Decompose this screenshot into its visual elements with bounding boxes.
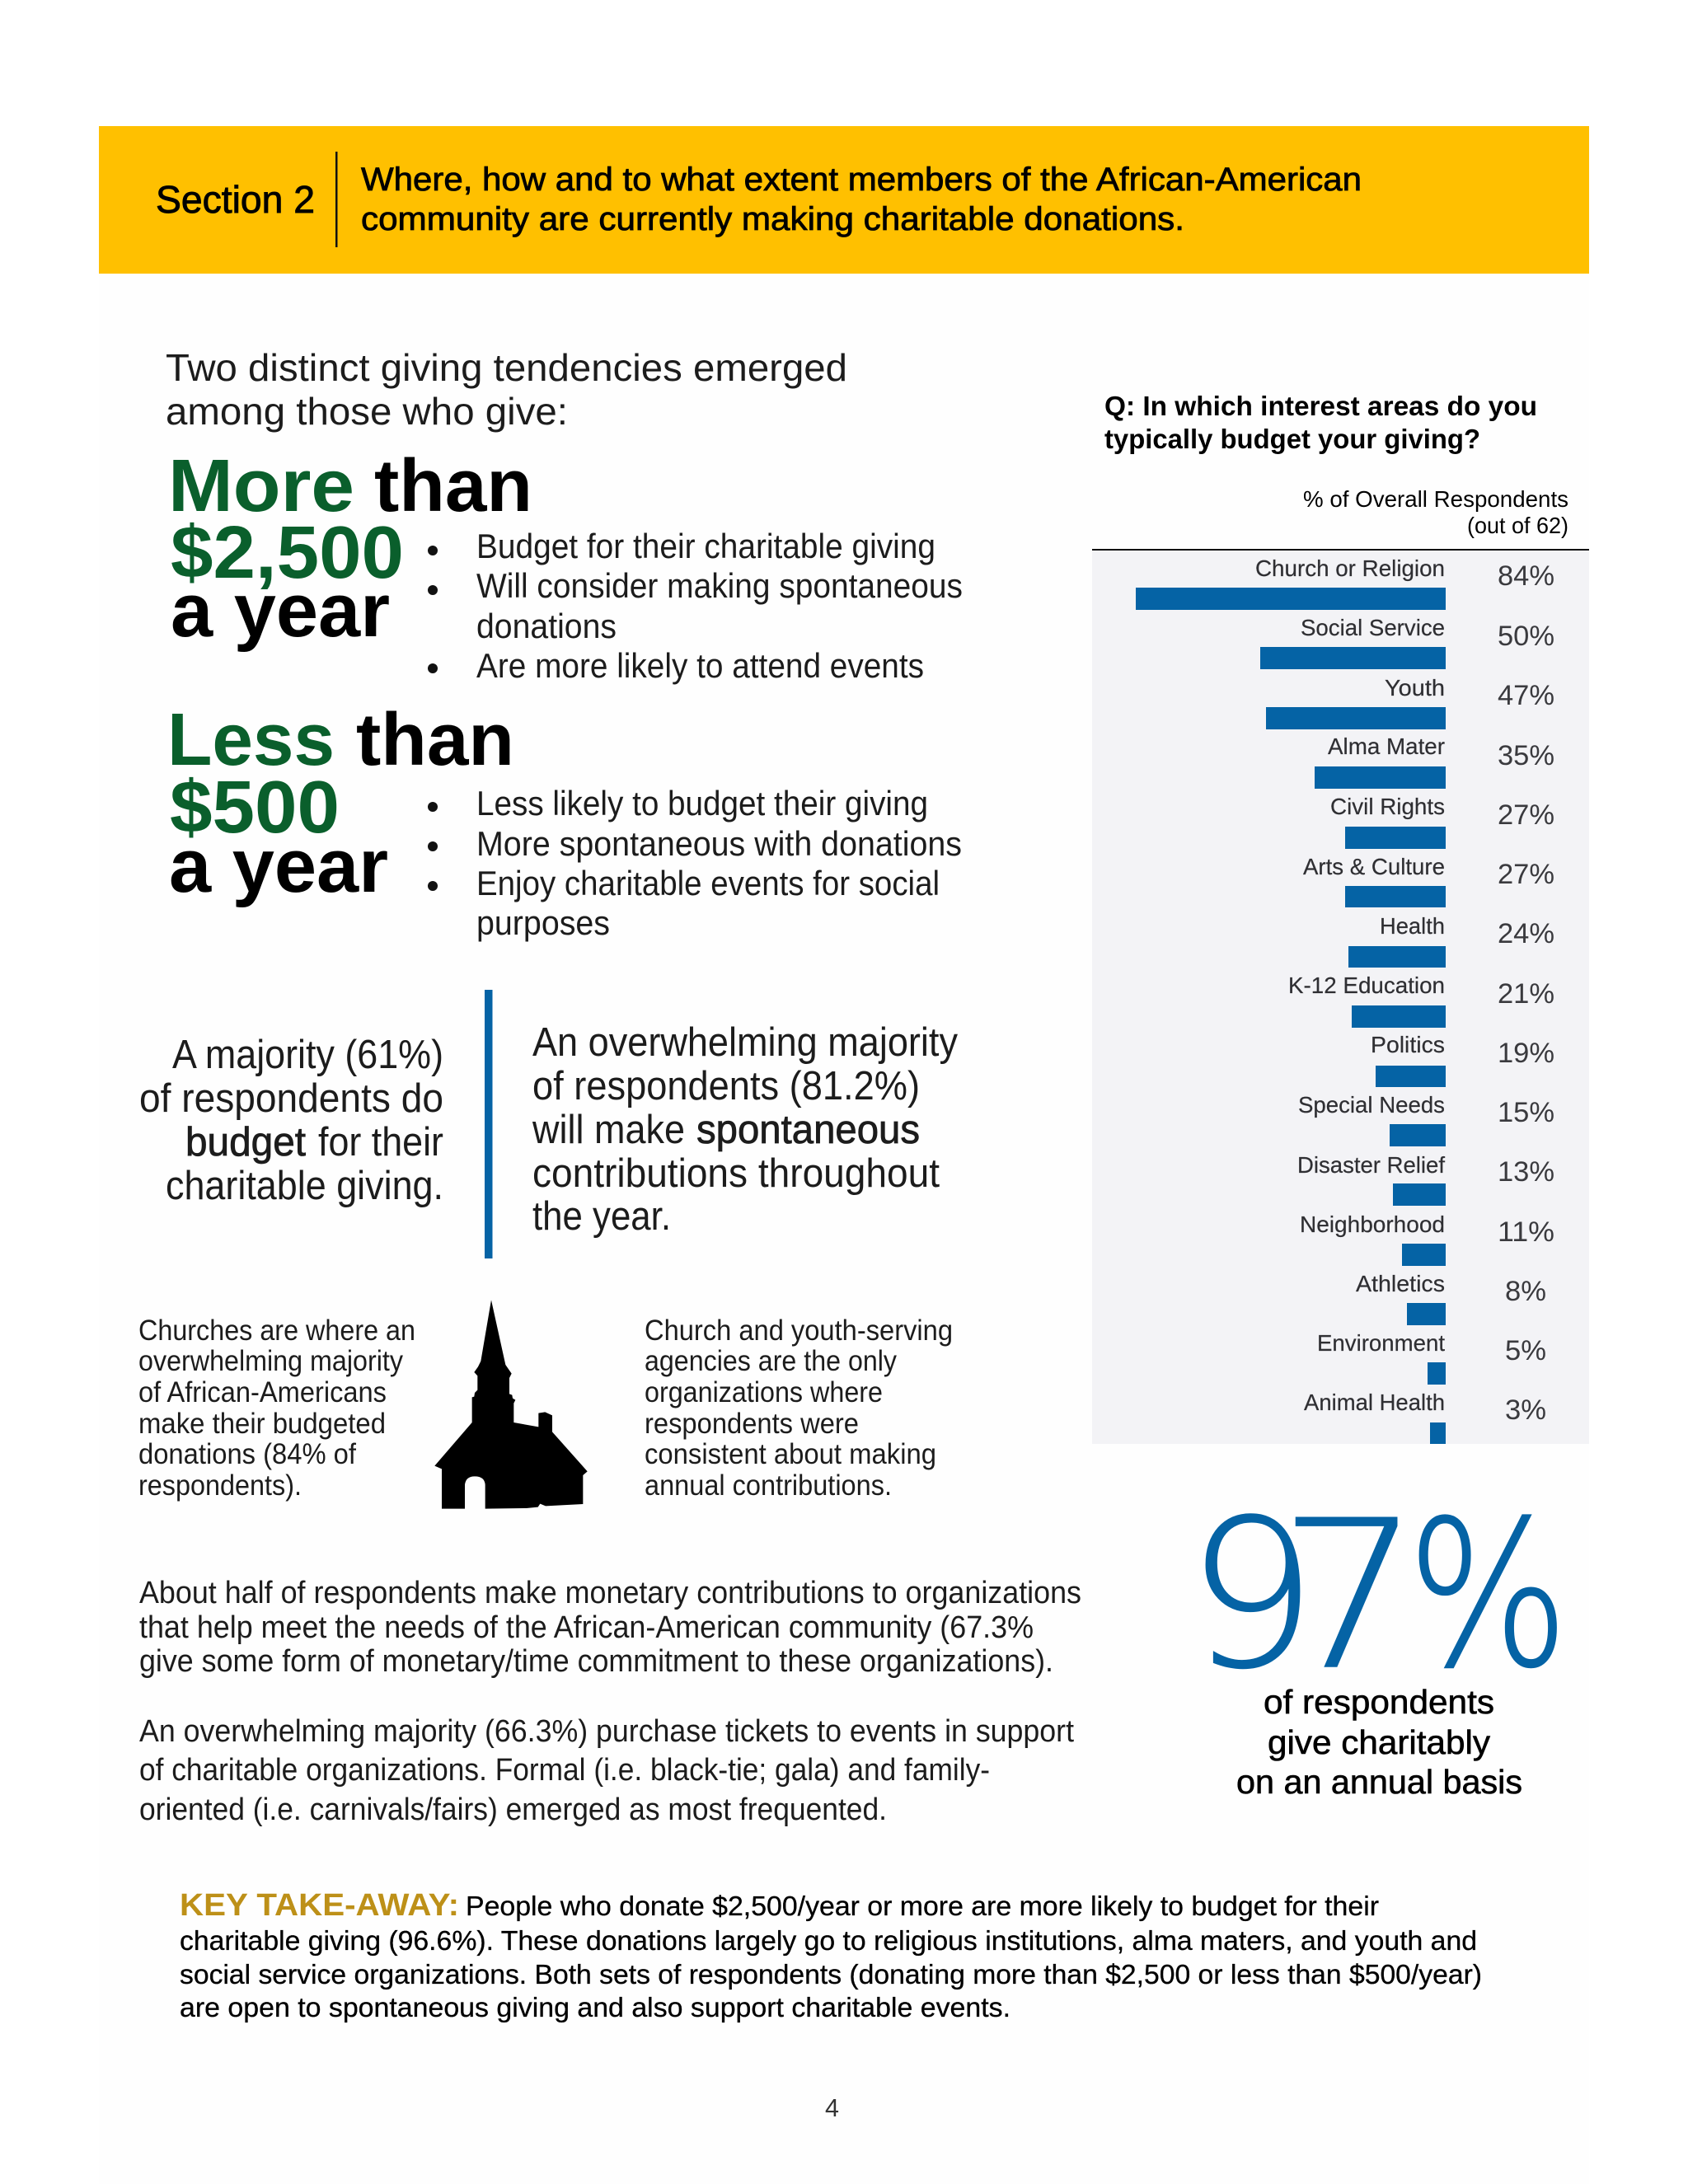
callout: 61% budget: A majority (61%) [172,1033,443,1077]
heading: less than $500 a year: $500 [170,766,340,849]
row: environment [1317,1330,1546,1385]
row: environment: 5% [1505,1335,1546,1366]
row: animal health: 3% [1505,1394,1546,1426]
callout: 61% budget: budget [185,1120,306,1165]
callout: 61% budget [139,1033,443,1208]
section heading [361,162,1362,237]
key take-away [180,1888,1482,2022]
heading: less than $500 a year [167,699,514,908]
text: church and youth-serving agencies: Church and youth-serving [645,1315,953,1347]
text: churches: of African-Americans [138,1376,387,1408]
text: churches: overwhelming majority [138,1345,403,1377]
chart column header [1303,486,1568,538]
row: arts and culture [1303,854,1554,907]
text: church and youth-serving agencies: agencies are the only [645,1345,897,1377]
bullet list: more than $2,500: Are more likely to attend events [476,646,924,685]
row: athletics [1356,1271,1546,1325]
chart column header: % of Overall Respondents [1303,486,1568,512]
callout: 81.2% spontaneous: contributions throughout [532,1151,940,1196]
callout: 81.2% spontaneous: the year. [532,1194,671,1239]
row: disaster relief: 13% [1498,1156,1554,1188]
chart question heading [1104,391,1537,454]
section header band [99,126,1589,274]
stat caption [1236,1683,1522,1801]
row: neighborhood: Neighborhood [1300,1212,1445,1237]
row: politics: Politics [1371,1032,1445,1057]
heading: less than $500 a year: a year [169,824,388,908]
row: civil rights [1330,794,1554,849]
row: health [1348,913,1554,968]
big stat: 97%: 7 [1278,1477,1422,1715]
row: environment: Environment [1317,1330,1445,1356]
paragraph: event tickets: oriented (i.e. carnivals/fairs) emerged as most frequented. [139,1793,887,1827]
chart question heading: Q: In which interest areas do you [1104,391,1537,421]
row: alma mater [1315,733,1554,789]
paragraph: event tickets: of charitable organizations. Formal (i.e. black-tie; gala) and family- [139,1753,990,1788]
blue vertical divider [485,990,493,1258]
row: disaster relief [1297,1152,1554,1206]
row: neighborhood: 11% [1498,1216,1554,1248]
row: animal health: Animal Health [1304,1390,1445,1415]
row: church or religion: 84% [1498,560,1554,592]
bullet list: less than $500: Less likely to budget their giving [476,784,928,823]
row: church or religion [1136,555,1554,610]
heading: more than $2,500 a year: a year [171,569,390,653]
row: civil rights: 27% [1498,799,1554,831]
bullet list: less than $500 [428,784,962,942]
callout: 61% budget: for their [318,1120,443,1165]
key take-away: People who donate $2,500/year or more are more likely to budget for their [466,1891,1379,1921]
row: health: 24% [1498,918,1554,949]
row: civil rights: Civil Rights [1330,794,1445,819]
heading: less than $500 a year: than [356,699,514,781]
row: special needs: Special Needs [1298,1092,1445,1118]
bullet list: more than $2,500: donations [476,607,617,645]
bullet list: more than $2,500: Will consider making spontaneous [476,566,963,605]
callout: 81.2% spontaneous: will make [532,1108,685,1152]
text: church and youth-serving agencies: consistent about making [645,1438,936,1470]
heading: more than $2,500 a year: than [374,445,532,527]
callout: 61% budget: of respondents do [139,1076,443,1121]
intro text: among those who give: [166,390,568,433]
chart column header: (out of 62) [1467,513,1568,538]
callout: 81.2% spontaneous [532,1020,958,1239]
intro text: Two distinct giving tendencies emerged [166,346,847,389]
key take-away: KEY TAKE-AWAY: [180,1888,459,1923]
big stat: 97% [1186,1476,1569,1715]
row: arts and culture: 27% [1498,859,1554,890]
paragraph: monetary contributions [139,1576,1081,1679]
bullet list: less than $500: Enjoy charitable events for social [476,864,940,902]
row: athletics: Athletics [1356,1271,1445,1296]
text: churches: donations (84% of [138,1438,356,1470]
heading: more than $2,500 a year: More [168,445,354,527]
bullet list: more than $2,500 [428,527,963,685]
text: churches [138,1315,415,1502]
text: church and youth-serving agencies: annual contributions. [645,1469,892,1502]
row: social service: 50% [1498,621,1554,652]
key take-away: are open to spontaneous giving and also support charitable events. [180,1992,1010,2022]
row: k-12 education: 21% [1498,978,1554,1010]
callout: 81.2% spontaneous: An overwhelming majority [532,1020,958,1065]
row: social service [1260,615,1554,669]
key take-away: social service organizations. Both sets of respondents (donating more than $2,500 or less than $500/year) [180,1959,1482,1990]
row: special needs [1298,1092,1554,1146]
row: arts and culture: Arts & Culture [1303,854,1445,879]
key take-away: charitable giving (96.6%). These donations largely go to religious institutions, alma maters, and youth and [180,1925,1477,1956]
row: k-12 education [1288,972,1554,1028]
big stat: 97%: 9 [1186,1476,1317,1714]
text: church and youth-serving agencies: respondents were [645,1408,859,1440]
row: k-12 education: K-12 Education [1288,972,1445,998]
row: animal health [1304,1390,1546,1444]
text: churches: respondents). [138,1469,302,1502]
row: youth: Youth [1385,675,1445,701]
intro text [166,346,847,433]
section label: Section 2 [156,178,315,221]
row: church or religion: Church or Religion [1255,555,1445,581]
paragraph: event tickets: An overwhelming majority (66.3%) purchase tickets to events in support [139,1714,1074,1749]
row: disaster relief: Disaster Relief [1297,1152,1445,1178]
row: special needs: 15% [1498,1097,1554,1128]
chart question heading: typically budget your giving? [1104,424,1480,454]
row: politics: 19% [1498,1038,1554,1069]
heading: more than $2,500 a year: $2,500 [171,512,404,594]
row: alma mater: 35% [1498,740,1554,771]
bullet list: less than $500: purposes [476,903,610,942]
stat caption: on an annual basis [1236,1763,1522,1801]
paragraph: monetary contributions: About half of respondents make monetary contributions to organizations [139,1576,1081,1610]
row: politics [1371,1032,1554,1087]
callout: 81.2% spontaneous: spontaneous [696,1108,920,1152]
stat caption: of respondents [1264,1683,1494,1721]
callout: 61% budget: charitable giving. [166,1164,443,1208]
section heading: Where, how and to what extent members of the African-American [361,162,1362,198]
row: neighborhood [1300,1212,1554,1266]
row: health: Health [1380,913,1445,939]
stat caption: give charitably [1268,1723,1491,1761]
row: social service: Social Service [1301,615,1445,640]
bullet list: more than $2,500: Budget for their charitable giving [476,527,935,565]
row: youth [1266,675,1554,729]
heading: less than $500 a year: Less [167,699,335,781]
page number: 4 [825,2093,839,2122]
heading: more than $2,500 a year [168,445,532,653]
text: churches: Churches are where an [138,1315,415,1347]
text: churches: make their budgeted [138,1408,386,1440]
bullet list: less than $500: More spontaneous with donations [476,824,962,863]
callout: 81.2% spontaneous: of respondents (81.2%) [532,1064,920,1108]
big stat: 97%: % [1407,1478,1569,1713]
paragraph: monetary contributions: that help meet the needs of the African-American community (67.3% [139,1610,1034,1645]
row: alma mater: Alma Mater [1328,733,1445,759]
row: youth: 47% [1498,680,1554,711]
text: church and youth-serving agencies: organizations where [645,1376,883,1408]
section heading: community are currently making charitable donations. [361,201,1184,237]
bar chart: interest areas [1092,549,1589,1444]
paragraph: monetary contributions: give some form of monetary/time commitment to these organizations). [139,1644,1053,1679]
text: church and youth-serving agencies [645,1315,953,1502]
paragraph: event tickets [139,1714,1074,1827]
icon: church silhouette [434,1300,588,1509]
row: athletics: 8% [1505,1276,1546,1307]
